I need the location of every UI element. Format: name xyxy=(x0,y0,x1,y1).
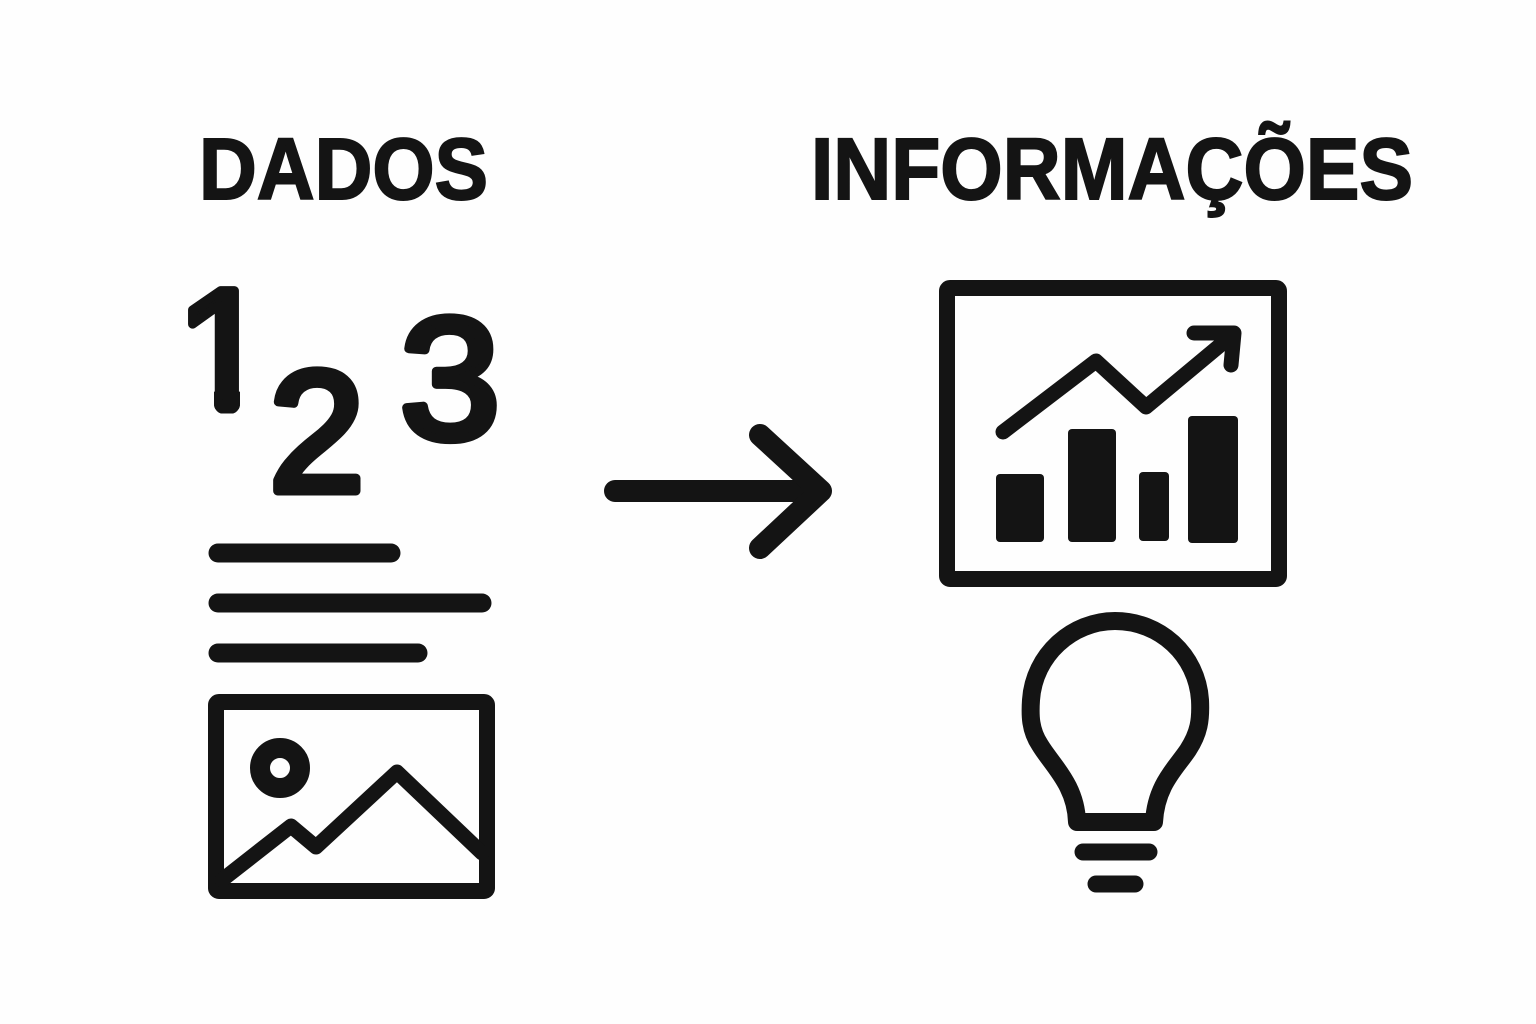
icon: text lines xyxy=(218,553,482,653)
heading: DADOS: DADOS xyxy=(199,121,488,218)
heading: INFORMAÇÕES: INFORMAÇÕES xyxy=(811,121,1413,218)
icon: numbers 1 2 3: 3 xyxy=(400,283,500,475)
icon: numbers 1 2 3: 1 xyxy=(176,254,272,446)
arrow xyxy=(615,435,821,548)
icon: numbers 1 2 3: 2 xyxy=(269,336,365,528)
icon: light bulb xyxy=(1031,621,1200,884)
icon: chart board xyxy=(947,288,1279,579)
bars xyxy=(996,416,1238,543)
chart frame xyxy=(947,288,1279,579)
icon: image placeholder xyxy=(216,702,487,891)
trend arrow xyxy=(1003,333,1234,432)
icon: numbers 1 2 3 xyxy=(188,286,497,496)
